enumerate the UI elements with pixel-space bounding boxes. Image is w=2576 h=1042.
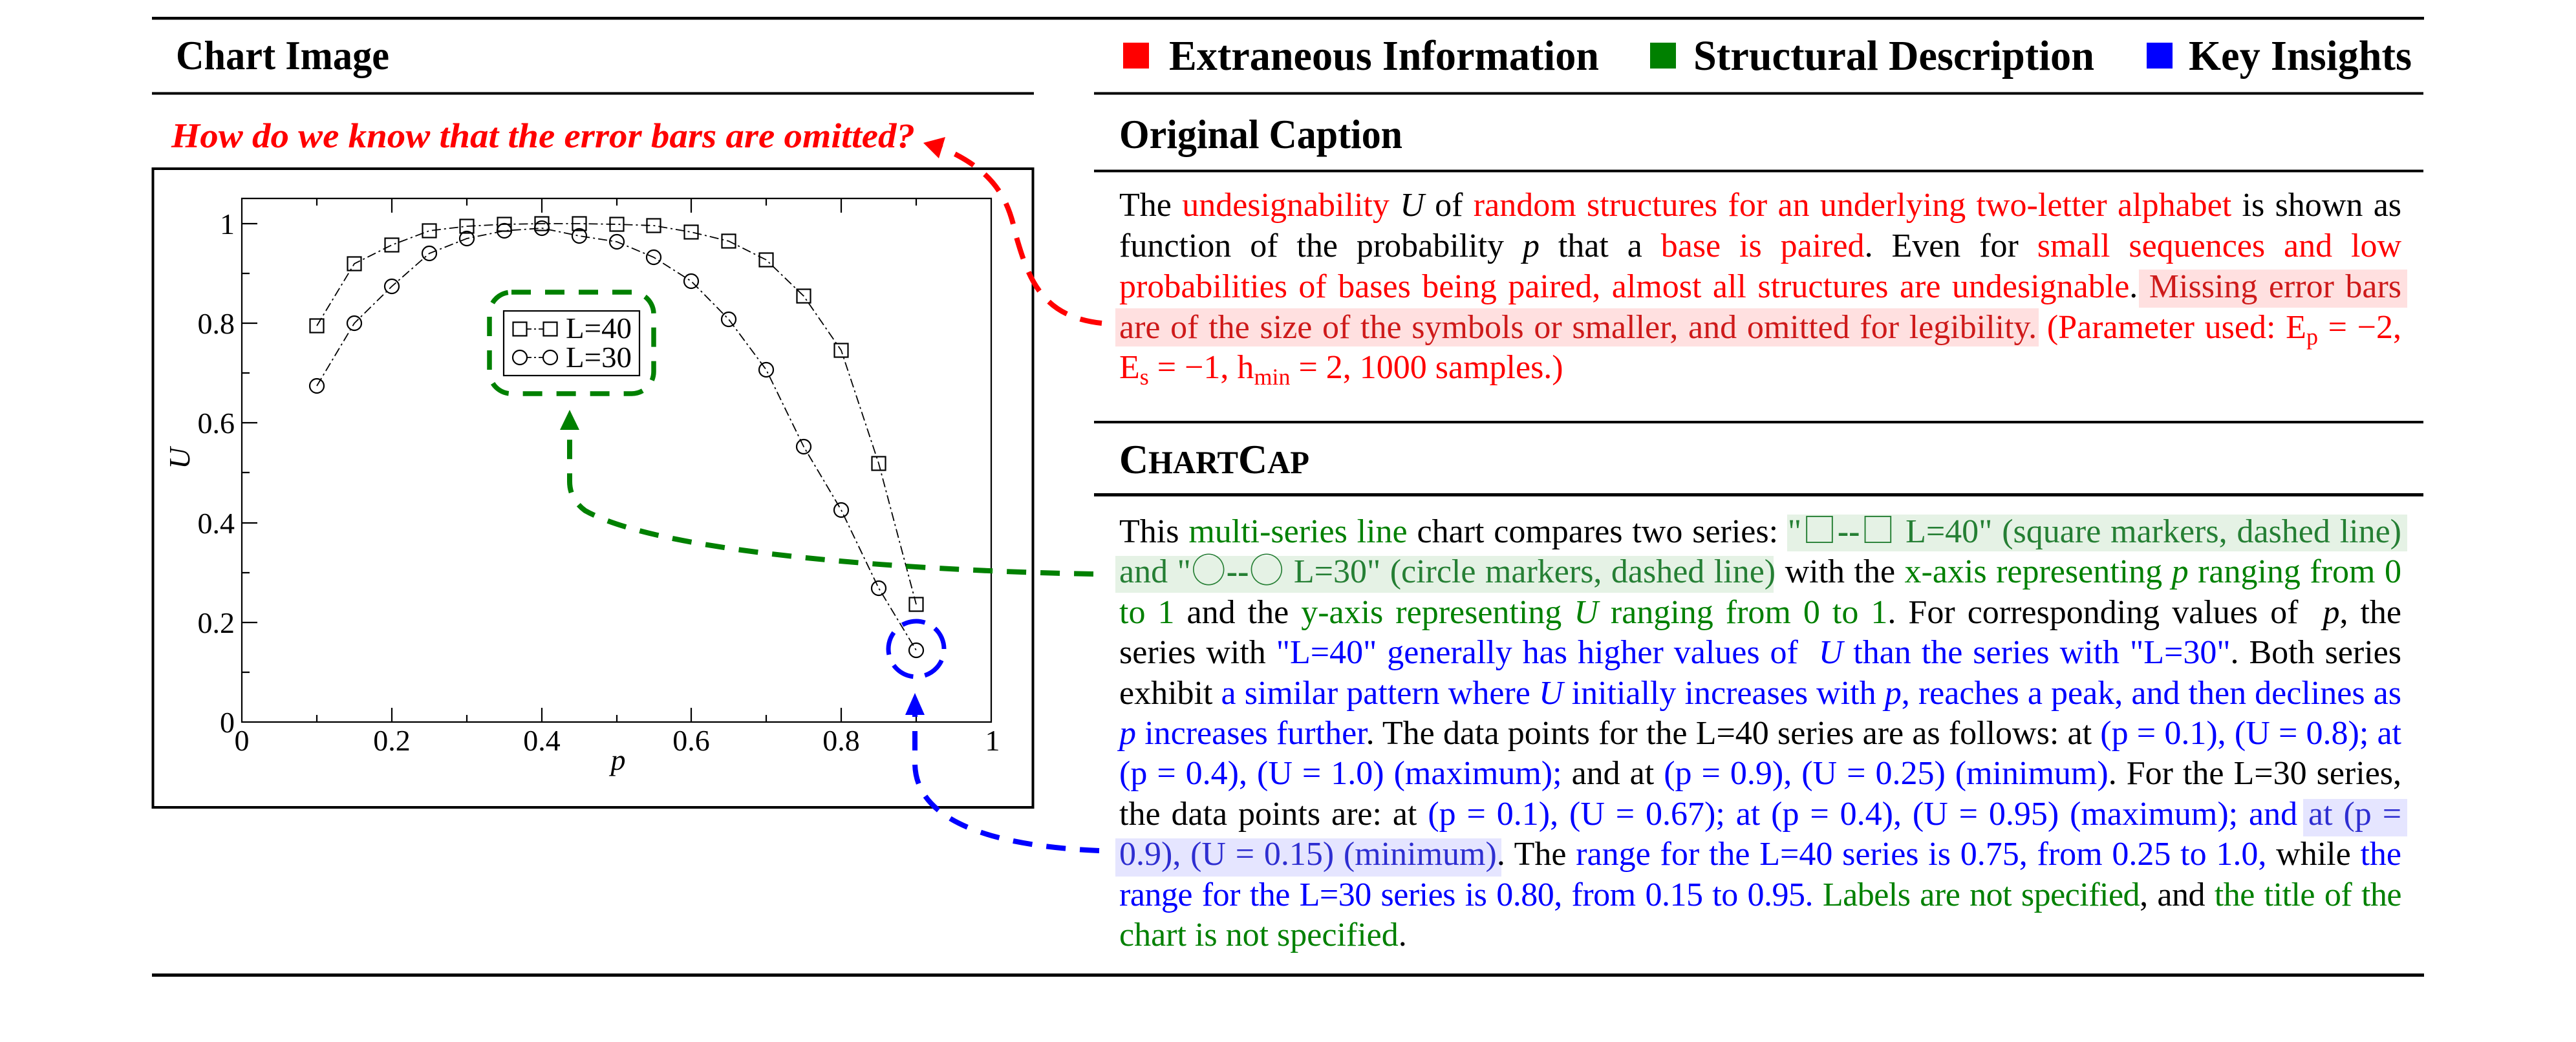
x axis labels: 0	[234, 724, 250, 757]
series: L=40	[310, 217, 923, 611]
annotation: dashed legend box	[489, 292, 654, 394]
arrow: chartcap to data point	[905, 693, 1099, 851]
y axis labels	[198, 207, 235, 739]
caption line 4: are of the size of the symbols or smaller, and omitted for legibility. (Parameter used: Ep = −2,	[1119, 309, 2401, 349]
caption line 3: probabilities of bases being paired, almost all structures are undesignable. Missing error bars	[1119, 268, 2401, 305]
x axis labels: 1	[985, 724, 1000, 757]
legend: extraneous information: Extraneous Information	[1169, 32, 1599, 80]
chartcap line 4: series with "L=40" generally has higher values of U than the series with "L=30". Both series	[1119, 634, 2401, 671]
y axis labels: 0.8	[198, 307, 235, 340]
x axis labels: 0.4	[523, 724, 561, 757]
panel: original caption text	[1119, 186, 2401, 389]
x axis title: p	[609, 743, 626, 776]
chart legend: L=30	[566, 341, 632, 374]
heading: chartcap: CHARTCAP	[1119, 436, 1309, 482]
heading: original caption: Original Caption	[1119, 111, 1402, 157]
highlight: minimum point	[1115, 799, 2407, 877]
chart legend	[504, 311, 639, 376]
panel: chartcap text	[1117, 503, 2401, 953]
caption line 1: The undesignability U of random structures for an underlying two-letter alphabet is shown as	[1119, 186, 2401, 224]
x axis labels: 0.8	[822, 724, 860, 757]
y axis labels: 1	[220, 207, 235, 240]
y axis labels: 0.4	[198, 507, 235, 540]
x axis labels: 0.2	[373, 724, 411, 757]
chartcap line 9: 0.9), (U = 0.15) (minimum). The range for the L=40 series is 0.75, from 0.25 to 1.0, while the	[1119, 835, 2401, 873]
highlight: series legend description	[1115, 515, 2407, 593]
chartcap line 3: to 1 and the y-axis representing U ranging from 0 to 1. For corresponding values of p, the	[1119, 594, 2401, 631]
chartcap line 6: p increases further. The data points for the L=40 series are as follows: at (p = 0.1), (U = 0.8); at	[1119, 715, 2401, 751]
chartcap line 7: (p = 0.4), (U = 1.0) (maximum); and at (p = 0.9), (U = 0.25) (minimum). For the L=30 series,	[1119, 755, 2401, 791]
legend: key insights: Key Insights	[2189, 32, 2412, 80]
y axis title: U	[163, 446, 196, 469]
caption line 2: function of the probability p that a base is paired. Even for small sequences and low	[1119, 228, 2401, 264]
chartcap line 5: exhibit a similar pattern where U initially increases with p, reaches a peak, and then declines as	[1119, 675, 2401, 711]
arrow: caption to question	[923, 137, 1102, 323]
highlight: missing error bars	[1115, 270, 2407, 346]
question: error bars: How do we know that the error bars are omitted?	[171, 116, 915, 155]
panel: chart image	[153, 169, 1033, 807]
chartcap line 11: chart is not specified.	[1119, 917, 1407, 953]
y axis labels: 0.6	[198, 407, 235, 440]
chartcap line 1: This multi-series line chart compares two series: "□--□ L=40" (square markers, dashed line)	[1119, 503, 2401, 552]
caption line 5: Es = −1, hmin = 2, 1000 samples.)	[1119, 349, 1563, 389]
plot frame and ticks	[242, 198, 991, 722]
x axis labels: 0.6	[672, 724, 710, 757]
arrow: chartcap to legend	[560, 410, 1093, 574]
legend: structural description: Structural Description	[1693, 32, 2094, 80]
series: L=30	[310, 221, 923, 657]
chartcap line 8: the data points are: at (p = 0.1), (U = 0.67); at (p = 0.4), (U = 0.95) (maximum); and at (p =	[1119, 795, 2401, 833]
chartcap line 10: range for the L=30 series is 0.80, from 0.15 to 0.95. Labels are not specified, and the title of the	[1119, 877, 2401, 913]
y axis labels: 0	[220, 706, 235, 739]
annotation: dashed data point circle	[877, 610, 956, 688]
chartcap line 2: and "◯--◯ L=30" (circle markers, dashed line) with the x-axis representing p ranging from 0	[1119, 544, 2401, 592]
y axis labels: 0.2	[198, 606, 235, 639]
heading: chart image: Chart Image	[176, 32, 389, 78]
chart legend: L=40	[566, 312, 632, 345]
x axis labels	[234, 724, 1000, 757]
